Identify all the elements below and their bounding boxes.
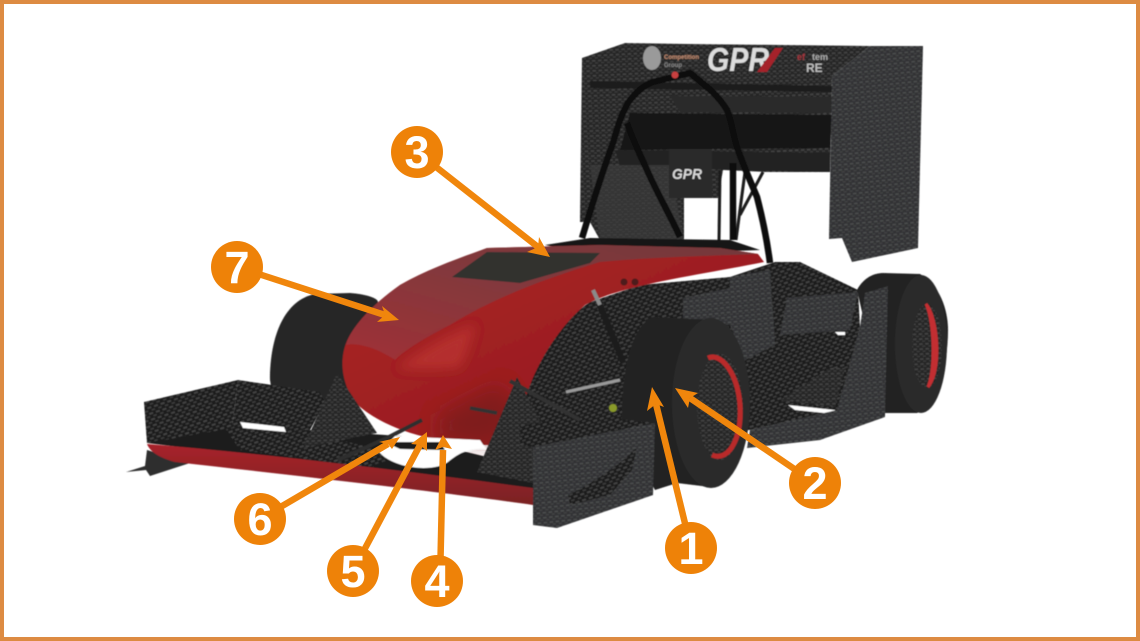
centre logo plate bbox=[669, 149, 712, 198]
callout 4 bbox=[411, 435, 463, 607]
callout 1: 1 bbox=[678, 523, 704, 574]
nose body bbox=[342, 238, 764, 445]
callout 7: 7 bbox=[224, 242, 250, 293]
right front endplate bbox=[533, 423, 655, 528]
right wing endplate bbox=[829, 46, 923, 262]
wing logo right: tem bbox=[812, 52, 828, 62]
suspension damper bbox=[593, 290, 623, 362]
vent holes bbox=[620, 278, 628, 286]
endplate recess bbox=[568, 447, 637, 505]
push rod bbox=[510, 381, 580, 420]
mid section vanes and floor bbox=[700, 262, 860, 430]
wing logo left bbox=[643, 46, 699, 70]
wing logo right: ef bbox=[797, 52, 806, 62]
lower red body bbox=[342, 245, 764, 445]
cockpit opening bbox=[452, 252, 600, 283]
centre logo: GPR bbox=[672, 166, 702, 183]
red leading edge bbox=[147, 444, 533, 505]
nose side rod bbox=[470, 408, 497, 413]
callout 2 bbox=[675, 388, 841, 509]
right rear tyre bbox=[857, 273, 948, 413]
rear wing bbox=[580, 41, 923, 263]
wing logo left: Group bbox=[664, 63, 682, 69]
callout 3: 3 bbox=[404, 127, 430, 178]
callout 5: 5 bbox=[340, 546, 366, 597]
wing slats bbox=[590, 81, 832, 243]
callout 5 bbox=[327, 432, 427, 597]
upper flap bbox=[232, 380, 325, 430]
left vertical vane bbox=[303, 373, 377, 448]
dark strut beneath nose bbox=[385, 442, 445, 450]
red light bbox=[672, 72, 678, 78]
rear support struts bbox=[719, 170, 763, 240]
black cockpit rim bbox=[545, 238, 760, 256]
white gap beneath nose bbox=[379, 436, 486, 468]
far rear tyre bbox=[270, 293, 378, 420]
side pod plate bbox=[683, 288, 730, 325]
side pod carbon panel bbox=[522, 277, 730, 430]
callout 6 bbox=[234, 437, 400, 545]
nose link rod bbox=[338, 420, 422, 460]
left wing slot bbox=[240, 422, 286, 432]
yellow sensor dot bbox=[609, 404, 617, 412]
wing foot bbox=[126, 450, 190, 476]
upper muted surface bbox=[346, 245, 758, 360]
left endplate bbox=[144, 380, 238, 443]
lower nose shading bbox=[440, 385, 518, 444]
roll hoop bbox=[582, 73, 770, 263]
wing back panel bbox=[580, 43, 870, 243]
callout 1 bbox=[647, 387, 717, 574]
callout 3 bbox=[391, 126, 550, 257]
wing floor bbox=[147, 425, 533, 492]
callout 4: 4 bbox=[424, 556, 450, 607]
wing logo right: RE bbox=[806, 61, 823, 75]
right wing flap bbox=[520, 417, 655, 447]
body highlight bbox=[398, 325, 475, 370]
callout 7 bbox=[211, 241, 399, 322]
wing logo right bbox=[797, 52, 828, 75]
right vertical vane bbox=[477, 377, 545, 483]
wing logo GPR: GPR bbox=[707, 41, 769, 78]
race car bbox=[126, 41, 948, 528]
callout 2: 2 bbox=[802, 458, 828, 509]
carbon floor texture bbox=[225, 428, 400, 468]
right side endplate and floor edge bbox=[747, 286, 888, 448]
front wing bbox=[126, 373, 655, 528]
suspension rod bbox=[566, 380, 620, 392]
callout 6: 6 bbox=[247, 494, 273, 545]
wing logo red accent bbox=[757, 48, 783, 72]
front right tyre bbox=[622, 317, 750, 490]
wing logo left: Competition bbox=[664, 55, 699, 61]
